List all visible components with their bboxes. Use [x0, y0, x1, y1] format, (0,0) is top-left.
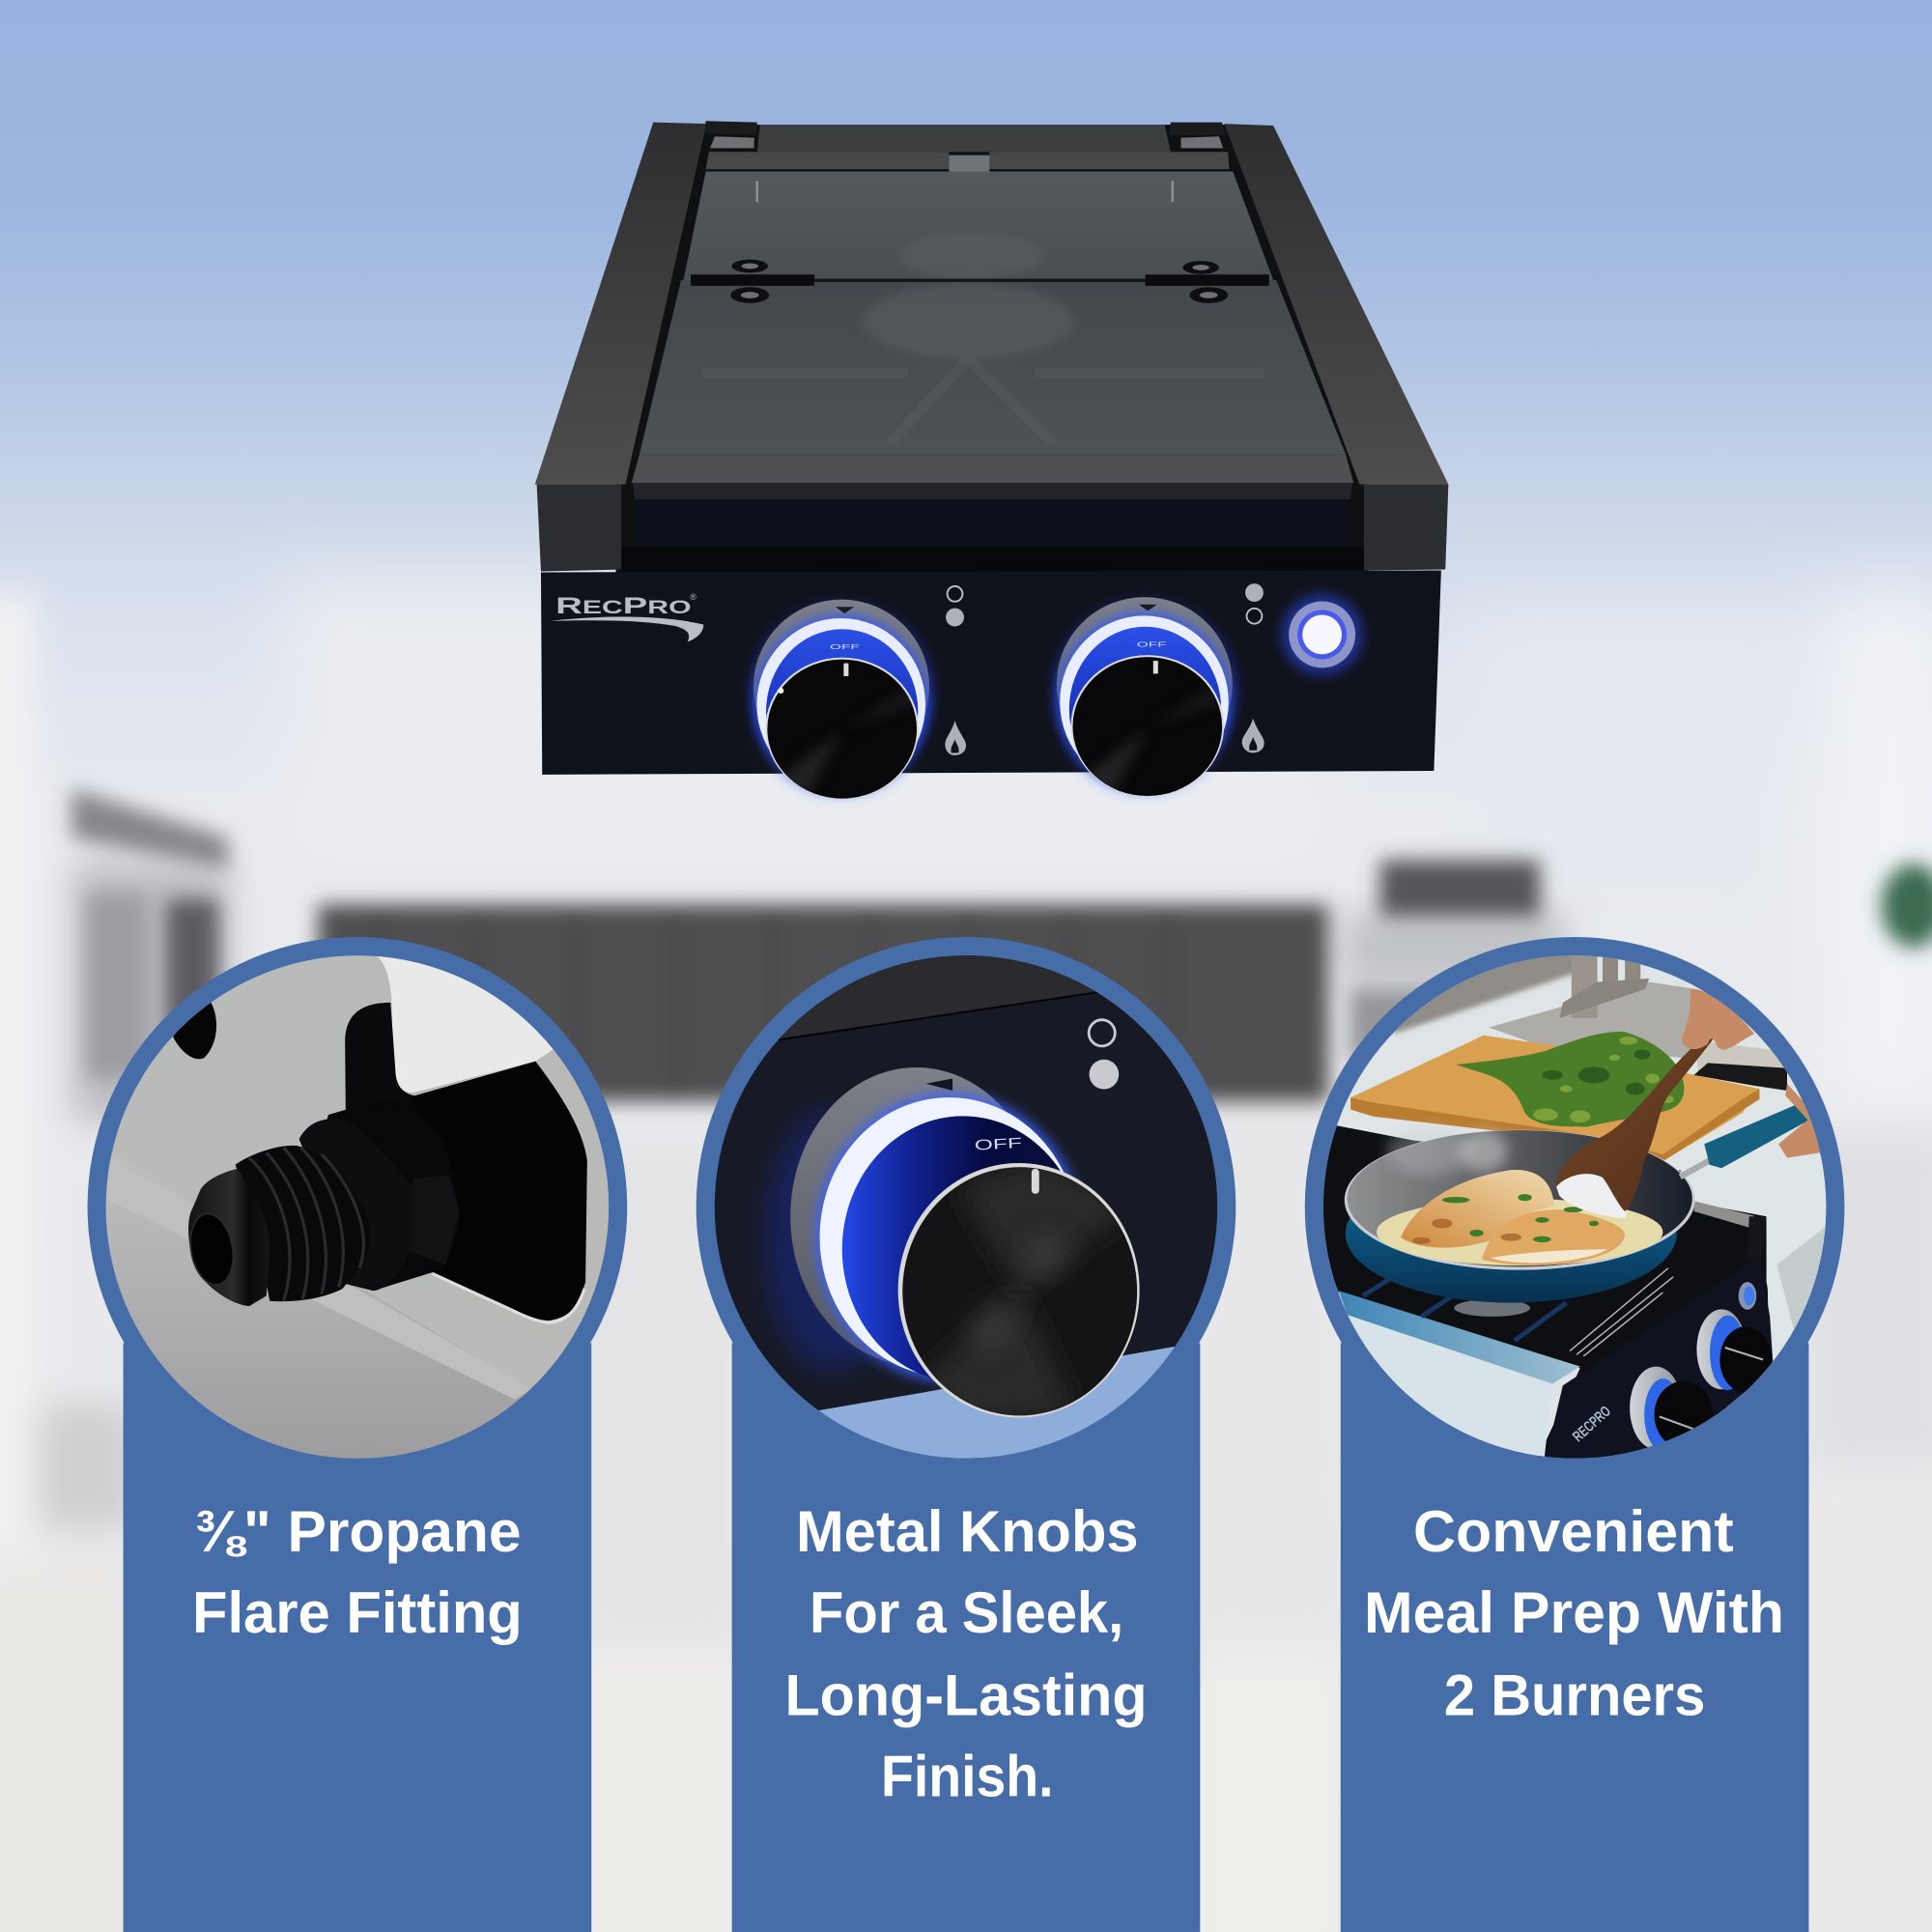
caption: Long-Lasting [784, 1663, 1148, 1728]
cooktop left side rail [535, 123, 706, 484]
indicator dots right [1245, 583, 1264, 624]
left knob assembly: OFF [830, 642, 861, 651]
right knob assembly: OFF [1137, 639, 1168, 648]
hinge left [691, 260, 814, 303]
front recess [618, 483, 1367, 572]
caption [192, 1499, 523, 1645]
front control panel [541, 571, 1441, 775]
top lid [704, 121, 1229, 174]
logo: RecPro: R EC P RO [555, 593, 692, 619]
panel: metal knobs [696, 937, 1236, 1932]
power button [1282, 594, 1363, 675]
caption: Finish. [881, 1745, 1054, 1809]
caption [1364, 1499, 1784, 1728]
circle ring [88, 937, 627, 1477]
icon: flame right [1242, 719, 1264, 753]
caption [784, 1499, 1148, 1809]
indicator dots left [946, 586, 964, 626]
cooktop right side rail [1225, 124, 1448, 484]
circle ring [696, 937, 1236, 1477]
caption: ⅜" Propane [195, 1499, 522, 1564]
photo: illuminated knob [715, 955, 1217, 1459]
caption: Meal Prep With [1364, 1580, 1784, 1645]
inner dark channel [616, 125, 1368, 572]
panel: two burners [1304, 937, 1845, 1932]
panel base [124, 1343, 591, 1932]
panel base [732, 1343, 1200, 1932]
photo: illuminated knob: OFF [974, 1135, 1022, 1154]
caption: For a Sleek, [810, 1580, 1123, 1645]
icon: flame left [945, 721, 966, 755]
caption: Metal Knobs [796, 1499, 1139, 1564]
caption: Flare Fitting [192, 1580, 523, 1645]
caption: 2 Burners [1444, 1663, 1705, 1728]
left knob assembly [751, 600, 934, 799]
circle ring [1305, 937, 1844, 1477]
right front block [1364, 484, 1448, 571]
right knob assembly [1053, 597, 1236, 797]
photo: flare fitting [106, 955, 609, 1459]
upper glass lid [684, 172, 1273, 280]
hinge right [1146, 261, 1269, 303]
photo: meal prep on stove [1323, 955, 1826, 1459]
logo: RecPro: ® [690, 592, 696, 602]
product: two burner cooktop [535, 121, 1448, 799]
front lip [632, 455, 1353, 483]
photo: meal prep on stove: RECPRO [1570, 1404, 1614, 1445]
panel: propane fitting [87, 937, 628, 1932]
panel base [1341, 1343, 1808, 1932]
logo: RecPro [551, 592, 703, 642]
caption: Convenient [1413, 1499, 1734, 1564]
lower glass lid [639, 280, 1346, 455]
left front block [537, 484, 621, 571]
